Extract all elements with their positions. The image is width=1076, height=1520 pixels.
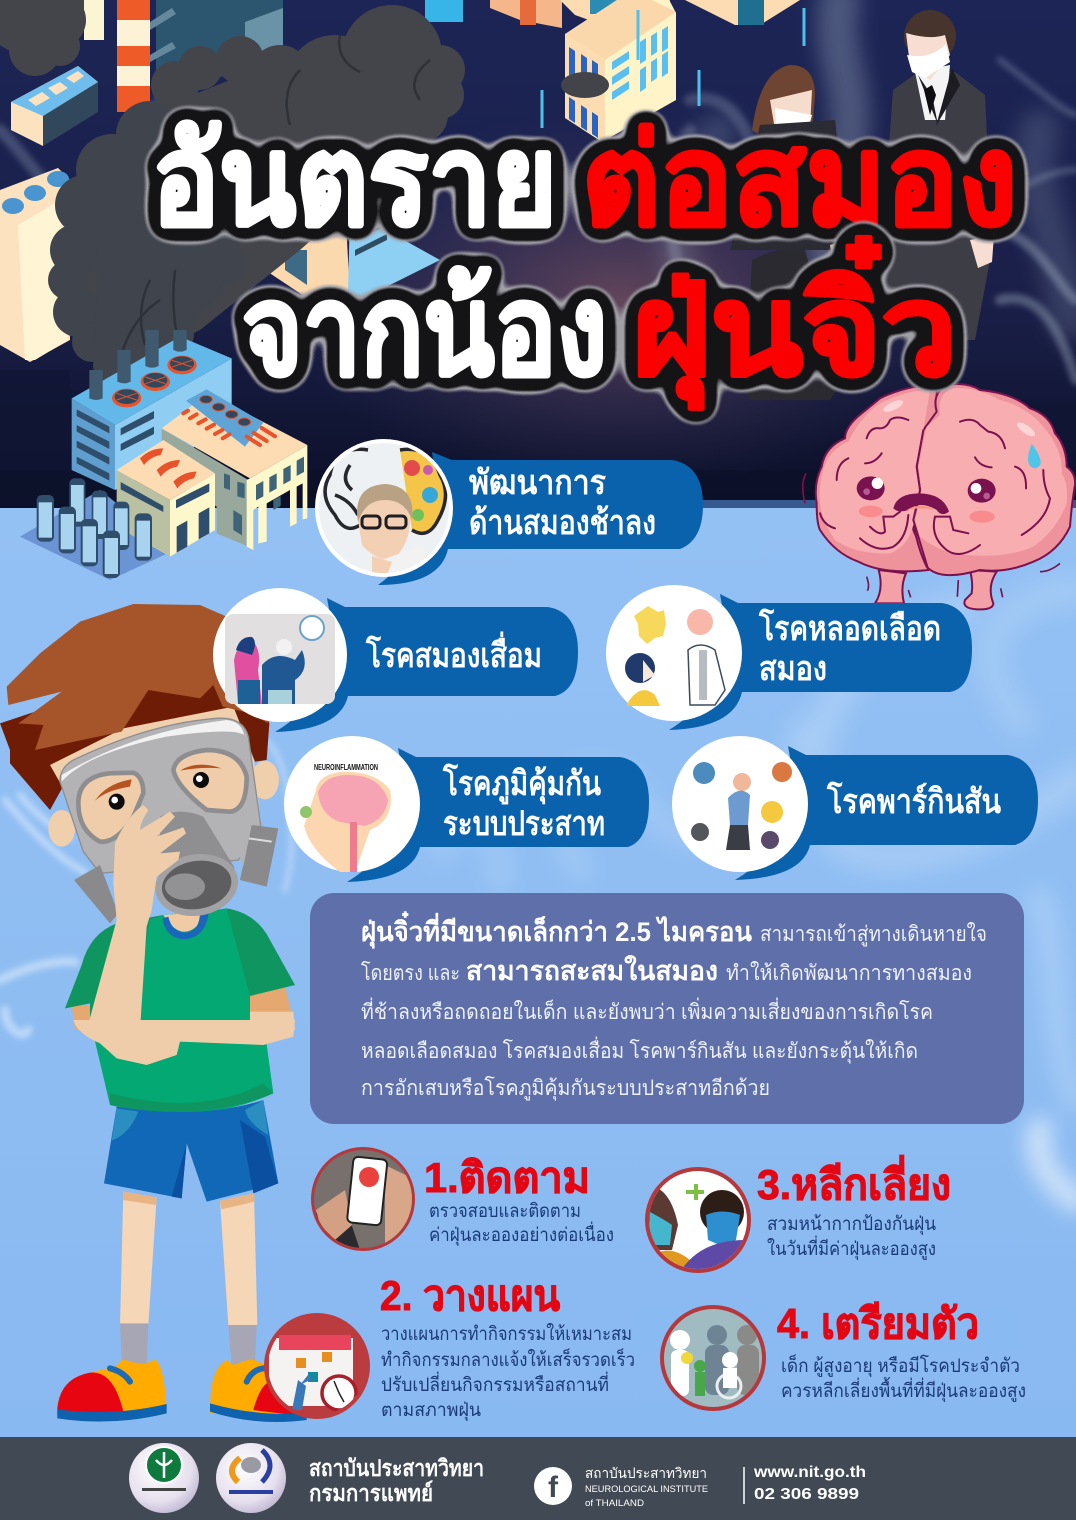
woman — [730, 65, 850, 400]
small wing — [117, 470, 170, 557]
roof fans — [112, 356, 197, 407]
panel: delayed brain development: ด้านสมองช้าลง — [469, 504, 656, 542]
pill tail — [347, 748, 649, 882]
office block, centre — [561, 0, 676, 142]
facebook page name: NEUROLOGICAL INSTITUTE — [585, 1484, 708, 1495]
description: ปรับเปลี่ยนกิจกรรมหรือสถานที่ — [381, 1371, 609, 1396]
organisation name — [309, 1455, 484, 1506]
photo circle: brain cross-section: NEUROINFLAMMATION — [314, 763, 378, 772]
pill tail — [378, 452, 703, 585]
mid building behind title — [265, 205, 440, 300]
stacks — [89, 330, 187, 400]
panel: neuroinflammation: ระบบประสาท — [443, 805, 605, 843]
description: สวมหน้ากากป้องกันฝุ่น — [767, 1214, 936, 1236]
facebook page name: of THAILAND — [585, 1498, 644, 1509]
description: ทำกิจกรรมกลางแจ้งให้เสร็จรวดเร็ว — [381, 1347, 635, 1371]
pill text: โรคพาร์กินสัน — [826, 781, 1001, 821]
wisps near boy — [0, 740, 292, 1034]
paragraph text: การอักเสบหรือโรคภูมิคุ้มกันระบบประสาทอีกด้วย — [361, 1076, 770, 1101]
tip 4: prepare — [660, 1300, 1026, 1411]
footer — [0, 1437, 1076, 1520]
organisation name: สถาบันประสาทวิทยา — [309, 1455, 484, 1481]
paragraph text: ฝุ่นจิ๋วที่มีขนาดเล็กกว่า 2.5 ไมครอน — [361, 911, 753, 949]
soft haze on dark sky — [676, 0, 1070, 320]
contact details: 02 306 9899 — [754, 1486, 859, 1503]
pill text: โรคหลอดเลือด — [758, 608, 941, 648]
factory with storage tanks — [20, 330, 307, 580]
description: เด็ก ผู้สูงอายุ หรือมีโรคประจำตัว — [781, 1353, 1020, 1378]
neck — [163, 912, 208, 932]
shorts — [104, 1100, 278, 1202]
pill text: โรคสมองเสื่อม — [365, 631, 542, 675]
logo: neurological institute — [216, 1443, 286, 1513]
boy in gas mask, upper — [0, 604, 295, 1030]
icon: facebook: f — [548, 1471, 559, 1504]
tip 1: monitor — [310, 1147, 614, 1251]
description — [429, 1201, 614, 1247]
brain face and fold lines — [820, 417, 1050, 570]
crossed forearm — [73, 1020, 295, 1065]
left plume — [48, 101, 245, 382]
title line 2: ฝุ่นจิ๋ว — [632, 237, 957, 409]
streetlights — [542, 8, 804, 128]
paragraph text: หลอดเลือดสมอง โรคสมองเสื่อม โรคพาร์กินสัน และยังกระตุ้นให้เกิด — [361, 1036, 918, 1064]
title line 2: จากน้อง — [242, 260, 607, 401]
brain eyes — [857, 476, 996, 523]
legs — [120, 1192, 257, 1325]
photo circle: elderly symptoms — [672, 736, 808, 872]
icon: vulnerable groups — [660, 1305, 766, 1411]
hair top — [7, 604, 268, 750]
cream wing — [162, 428, 248, 547]
panel: delayed brain development — [315, 439, 703, 585]
shirt lower — [90, 1020, 273, 1114]
description — [781, 1353, 1026, 1403]
heading: 4. เตรียมตัว — [777, 1300, 979, 1347]
paragraph text: สามารถสะสมในสมอง — [466, 955, 718, 986]
chimney — [84, 0, 150, 112]
title line 2 — [242, 237, 957, 409]
left shoe — [57, 1359, 167, 1421]
main blue block — [72, 398, 115, 490]
socks — [120, 1323, 257, 1367]
pill tail — [669, 594, 972, 730]
panel: explanation paragraph — [310, 893, 1024, 1124]
brain lighter face area — [820, 388, 1067, 556]
title line 1: ต่อสมอง — [582, 110, 1017, 251]
colourful shop row, top — [425, 0, 670, 28]
icon: calendar and clock — [264, 1313, 370, 1419]
paragraph text: โดยตรง และ — [361, 961, 460, 985]
raised hand and arm — [87, 805, 186, 1030]
pill text: โรคภูมิคุ้มกัน — [442, 763, 601, 805]
panel: neuroinflammation — [284, 736, 649, 882]
sweat drop — [1028, 443, 1041, 468]
man — [880, 10, 994, 340]
description: ควรหลีกเลี่ยงพื้นที่ที่มีฝุ่นละอองสูง — [781, 1377, 1026, 1403]
facebook page name — [585, 1465, 708, 1509]
title line 1 — [152, 110, 1017, 251]
panel: dementia — [213, 588, 578, 732]
organisation name: กรมการแพทย์ — [309, 1480, 433, 1506]
icon: phone in hands — [310, 1147, 416, 1251]
top-left cloud — [0, 0, 86, 76]
heading: 1.ติดตาม — [424, 1154, 590, 1201]
brain mouth — [893, 493, 949, 514]
boy body and legs — [57, 1020, 307, 1422]
heading: 3.หลีกเลี่ยง — [757, 1155, 951, 1208]
photo circle: elderly couple — [213, 588, 347, 722]
top cloud — [85, 5, 465, 370]
heading: 2. วางแผน — [380, 1272, 560, 1319]
panel: parkinson's disease — [672, 736, 1038, 880]
tip 3: avoid — [645, 1155, 951, 1275]
tall cream tower, left — [0, 168, 70, 362]
gas mask — [60, 718, 278, 923]
logo: department of medical services — [129, 1443, 199, 1513]
paragraph text: สามารถเข้าสู่ทางเดินหายใจ — [760, 922, 987, 947]
description: ค่าฝุ่นละอองอย่างต่อเนื่อง — [429, 1221, 614, 1247]
facebook page name: สถาบันประสาทวิทยา — [585, 1465, 707, 1481]
shirt upper — [65, 908, 295, 1023]
paragraph text: ที่ช้าลงหรือถดถอยในเด็ก และยังพบว่า เพิ่มความเสี่ยงของการเกิดโรค — [361, 997, 933, 1024]
smoke shadow lines — [120, 35, 430, 360]
panel: cerebrovascular disease: สมอง — [759, 650, 827, 688]
arms behind shirt — [72, 987, 292, 1030]
pill tail — [735, 746, 1038, 880]
small warehouse, upper left — [11, 66, 98, 146]
face — [50, 707, 260, 853]
icon: facebook — [534, 1467, 572, 1505]
description: ตามสภาพฝุ่น — [381, 1400, 481, 1422]
photo circle: child with brain doodles — [315, 439, 455, 580]
tremble lines — [803, 473, 1060, 597]
brain legs — [875, 570, 997, 609]
dark hair — [0, 617, 269, 810]
right shoe — [210, 1359, 307, 1417]
paragraph text: ทำให้เกิดพัฒนาการทางสมอง — [726, 961, 972, 985]
ears — [48, 761, 279, 847]
storage tanks — [37, 478, 152, 578]
top right block — [685, 0, 800, 25]
pill text: พัฒนาการ — [469, 464, 607, 502]
description — [381, 1323, 635, 1422]
title — [152, 110, 1017, 409]
dark smoke plume — [0, 0, 465, 382]
brain lobes — [816, 384, 1075, 575]
paragraph text — [361, 911, 987, 1101]
pill tail — [275, 598, 578, 732]
isometric city buildings, top — [0, 0, 804, 362]
people wearing masks — [730, 10, 994, 400]
contact details — [753, 1464, 866, 1503]
description: ในวันที่มีค่าฝุ่นละอองสูง — [767, 1235, 936, 1261]
panel: brain character — [803, 384, 1075, 609]
tip 2: plan — [264, 1272, 635, 1422]
photo circle: stroke symptoms — [606, 585, 742, 721]
smoke wisps on dark sky — [0, 60, 1076, 380]
dark teal block, top — [150, 0, 283, 80]
dark city sky background — [0, 0, 1076, 510]
description: ตรวจสอบและติดตาม — [429, 1201, 581, 1222]
icon: two people in masks — [645, 1167, 751, 1275]
contact details: www.nit.go.th — [753, 1464, 866, 1481]
description — [767, 1214, 936, 1261]
photo circle: brain cross-section — [284, 736, 420, 872]
description: วางแผนการทำกิจกรรมให้เหมาะสม — [381, 1323, 632, 1345]
panel: cerebrovascular disease — [606, 585, 972, 730]
light blue ground — [0, 508, 1076, 1437]
smoke wisps on blue ground — [440, 590, 1076, 1200]
title line 1: อันตราย — [152, 110, 557, 251]
